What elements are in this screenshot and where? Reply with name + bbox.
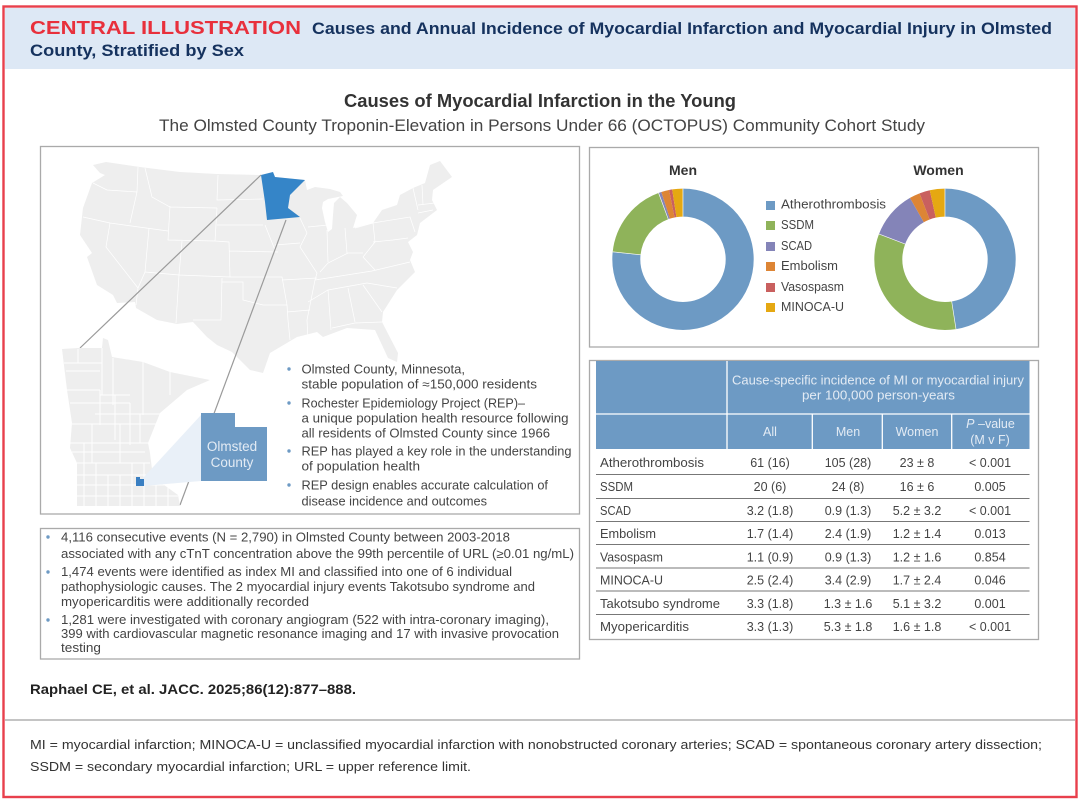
table row: SCAD: < 0.001 bbox=[969, 504, 1011, 518]
table row: Takotsubo syndrome bbox=[600, 597, 1006, 611]
table row: Atherothrombosis: Atherothrombosis bbox=[600, 456, 704, 470]
table header: (M v F) bbox=[970, 433, 1010, 447]
callout: Olmsted County: Olmsted bbox=[207, 439, 257, 454]
table row: SCAD: 3.2 (1.8) bbox=[747, 504, 793, 518]
table row: Vasospasm: 1.1 (0.9) bbox=[747, 550, 793, 564]
legend: SSDM bbox=[781, 218, 814, 232]
footnote abbreviations: SSDM = secondary myocardial infarction; URL = upper reference limit. bbox=[30, 759, 471, 774]
panel: map and population bbox=[40, 146, 580, 514]
table row: SSDM: 20 (6) bbox=[754, 480, 786, 494]
table row: Atherothrombosis: 61 (16) bbox=[750, 456, 790, 470]
legend: SCAD bbox=[781, 239, 812, 253]
panel: incidence table bbox=[590, 360, 1038, 640]
panel: study cohort bullets: 4,116 consecutive events (N = 2,790) in Olmsted County between 2003-2018 bbox=[61, 530, 510, 544]
subtitle: The Olmsted County Troponin-Elevation in Persons Under 66 (OCTOPUS) Community Cohort Study bbox=[159, 117, 926, 135]
legend: Vasospasm bbox=[781, 280, 844, 294]
table row: Takotsubo syndrome: Takotsubo syndrome bbox=[600, 597, 720, 611]
table row: Takotsubo syndrome: 3.3 (1.8) bbox=[747, 597, 793, 611]
callout: Olmsted County: County bbox=[211, 455, 254, 470]
table header: P –value bbox=[966, 417, 1015, 431]
table row: MINOCA-U: 0.046 bbox=[974, 574, 1006, 588]
text block: Olmsted and REP bullets: all residents of Olmsted County since 1966 bbox=[302, 426, 550, 440]
table row: MINOCA-U: MINOCA-U bbox=[600, 574, 663, 588]
map: Minnesota counties bbox=[62, 338, 210, 506]
banner title: Causes and Annual Incidence of Myocardial Infarction and Myocardial Injury in Olmsted bbox=[312, 19, 1052, 38]
table row: Atherothrombosis bbox=[600, 456, 1011, 470]
footnote abbreviations bbox=[30, 737, 1042, 774]
table header: All bbox=[763, 425, 777, 439]
table row: Vasospasm: 1.2 ± 1.6 bbox=[893, 550, 941, 564]
text block: Olmsted and REP bullets: disease incidence and outcomes bbox=[302, 494, 487, 508]
panel: study cohort bullets: 1,474 events were identified as index MI and classified into one of 6 individual bbox=[61, 565, 512, 579]
panel: study cohort bullets: 1,281 were investigated with coronary angiogram (522 with intra-coronary imaging), bbox=[61, 613, 549, 627]
footnote abbreviations: MI = myocardial infarction; MINOCA-U = unclassified myocardial infarction with nonobstructed coronary arteries; SCAD = spontaneous coronary artery dissection; bbox=[30, 737, 1042, 752]
panel: donut charts bbox=[590, 148, 1038, 347]
table row: MINOCA-U: 1.7 ± 2.4 bbox=[893, 574, 941, 588]
table row: Vasospasm bbox=[600, 550, 1006, 564]
table row: Takotsubo syndrome: 5.1 ± 3.2 bbox=[893, 597, 941, 611]
legend bbox=[766, 198, 886, 314]
table row: SSDM: SSDM bbox=[600, 480, 633, 494]
table row: MINOCA-U bbox=[600, 574, 1006, 588]
panel: study cohort bullets bbox=[40, 528, 580, 659]
panel: study cohort bullets: testing bbox=[61, 641, 101, 655]
map: United States bbox=[80, 161, 452, 373]
table row: MINOCA-U: 2.5 (2.4) bbox=[747, 574, 793, 588]
text block: Olmsted and REP bullets: a unique population health resource following bbox=[302, 412, 569, 426]
map: Minnesota highlighted bbox=[261, 172, 305, 220]
table row: Myopericarditis: 3.3 (1.3) bbox=[747, 620, 793, 634]
table row: Vasospasm: Vasospasm bbox=[600, 550, 663, 564]
panel: study cohort bullets: myopericarditis were additionally recorded bbox=[61, 595, 309, 609]
table row: Myopericarditis: 1.6 ± 1.8 bbox=[893, 620, 941, 634]
legend: MINOCA-U bbox=[781, 300, 844, 314]
banner title bbox=[30, 19, 1052, 60]
table row: Atherothrombosis: 23 ± 8 bbox=[900, 456, 934, 470]
panel: study cohort bullets: pathophysiologic causes. The 2 myocardial injury events Takotsubo syndrome and bbox=[61, 580, 535, 594]
banner title: County, Stratified by Sex bbox=[30, 41, 245, 60]
table header bbox=[596, 361, 1030, 449]
text block: Olmsted and REP bullets bbox=[287, 362, 572, 508]
panel: study cohort bullets: 399 with cardiovascular magnetic resonance imaging and 17 with invasive provocation bbox=[61, 627, 559, 641]
text block: Olmsted and REP bullets: REP design enables accurate calculation of bbox=[302, 478, 549, 492]
panel: study cohort bullets: associated with any cTnT concentration above the 99th percentile of URL (≥0.01 ng/mL) bbox=[61, 547, 574, 561]
legend: Embolism bbox=[781, 259, 838, 273]
legend: Atherothrombosis bbox=[781, 198, 886, 212]
text block: Olmsted and REP bullets: Olmsted County, Minnesota, bbox=[302, 362, 465, 376]
connector line: lower bbox=[180, 220, 286, 505]
text block: Olmsted and REP bullets: stable population of ≈150,000 residents bbox=[302, 378, 537, 392]
table row: SSDM bbox=[600, 480, 1006, 494]
table row: MINOCA-U: 3.4 (2.9) bbox=[825, 574, 871, 588]
text block: Olmsted and REP bullets: of population health bbox=[302, 460, 420, 474]
table row: SSDM: 24 (8) bbox=[832, 480, 864, 494]
donut chart: Men bbox=[613, 189, 740, 316]
heading: Men: Men bbox=[669, 162, 697, 178]
table header: per 100,000 person-years bbox=[802, 388, 955, 402]
table row: Vasospasm: 0.854 bbox=[974, 550, 1006, 564]
table row: Atherothrombosis: < 0.001 bbox=[969, 456, 1011, 470]
table row: SCAD: SCAD bbox=[600, 504, 631, 518]
connector line: upper bbox=[80, 175, 261, 348]
text block: Olmsted and REP bullets: REP has played a key role in the understanding bbox=[302, 444, 572, 458]
heading: Women: Women bbox=[913, 162, 964, 178]
table row: Myopericarditis: 5.3 ± 1.8 bbox=[824, 620, 872, 634]
header banner bbox=[5, 8, 1075, 69]
table row: Embolism: Embolism bbox=[600, 527, 656, 541]
table row: Myopericarditis: Myopericarditis bbox=[600, 620, 689, 634]
table header: Men bbox=[836, 425, 860, 439]
table row: SSDM: 0.005 bbox=[974, 480, 1006, 494]
table row: Takotsubo syndrome: 0.001 bbox=[974, 597, 1006, 611]
table row: Embolism: 1.2 ± 1.4 bbox=[893, 527, 941, 541]
table row: Embolism bbox=[600, 527, 1006, 541]
table header: Cause-specific incidence of MI or myocardial injury bbox=[732, 374, 1025, 388]
table row: Myopericarditis: < 0.001 bbox=[969, 620, 1011, 634]
table row: SCAD: 5.2 ± 3.2 bbox=[893, 504, 941, 518]
table row: SCAD bbox=[600, 504, 1011, 518]
table rules bbox=[596, 474, 1030, 614]
callout: Olmsted County bbox=[201, 413, 267, 481]
table row: Embolism: 1.7 (1.4) bbox=[747, 527, 793, 541]
icon: Olmsted County on state map bbox=[136, 477, 144, 486]
table row: Embolism: 2.4 (1.9) bbox=[825, 527, 871, 541]
main title: Causes of Myocardial Infarction in the Young bbox=[344, 90, 736, 111]
table row: Vasospasm: 0.9 (1.3) bbox=[825, 550, 871, 564]
citation: Raphael CE, et al. JACC. 2025;86(12):877–888. bbox=[30, 681, 356, 697]
table row: SCAD: 0.9 (1.3) bbox=[825, 504, 871, 518]
donut chart: Women bbox=[879, 189, 1002, 329]
label: central illustration: CENTRAL ILLUSTRATION bbox=[30, 18, 301, 38]
table row: Takotsubo syndrome: 1.3 ± 1.6 bbox=[824, 597, 872, 611]
zoom wedge to Olmsted County bbox=[143, 415, 201, 486]
table row: Embolism: 0.013 bbox=[974, 527, 1006, 541]
table header: Women bbox=[896, 425, 938, 439]
table row: Atherothrombosis: 105 (28) bbox=[825, 456, 871, 470]
text block: Olmsted and REP bullets: Rochester Epidemiology Project (REP)– bbox=[302, 396, 525, 410]
table row: SSDM: 16 ± 6 bbox=[900, 480, 934, 494]
table row: Myopericarditis bbox=[600, 620, 1011, 634]
